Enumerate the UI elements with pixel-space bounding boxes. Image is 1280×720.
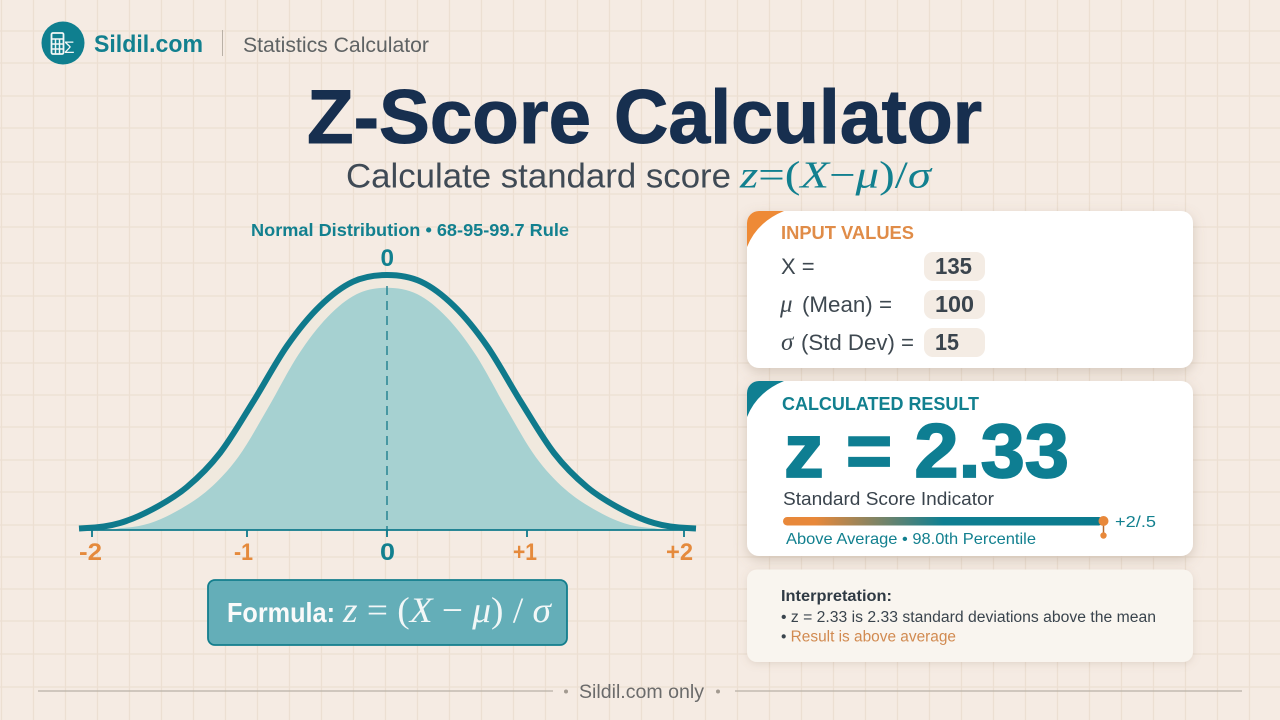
row: standard deviation: (Std Dev) = [801,330,914,355]
subtitle [346,154,933,196]
chart: normal distribution curve [77,220,697,566]
centre dashed line [386,286,388,540]
title [307,75,982,160]
axis [80,530,695,537]
formula box: z = (X − μ) / σ [342,590,552,630]
panel: interpretation: • Result is above average [781,628,956,646]
icon: calculator and sigma logo: Σ [64,38,75,57]
percentile note: Above Average • 98.0th Percentile [786,531,1036,548]
axis labels: +1 [513,539,537,566]
panel: input values [747,211,1193,368]
row: X: 135 [935,253,972,279]
footer: Sildil.com only [579,682,705,703]
bell curve stroke [79,275,696,528]
icon: calculator and sigma logo [42,22,84,64]
row: mean: μ [779,291,793,318]
teal corner accent [747,381,784,417]
heading: CALCULATED RESULT [782,393,980,414]
curve background band [77,275,697,530]
axis labels [79,539,693,566]
chart title: Normal Distribution • 68-95-99.7 Rule [251,220,569,240]
indicator label: Standard Score Indicator [783,488,994,509]
row: mean: (Mean) = [802,292,892,317]
row: standard deviation [781,328,985,357]
panel: calculated result [747,381,1193,556]
score indicator bar [783,514,1156,539]
row: mean [779,290,985,319]
axis labels: -2 [79,539,102,566]
brand name: Sildil.com [94,31,203,58]
subtitle: z=(X−μ)/σ [739,154,933,196]
header: brand and section [42,22,429,64]
title: Z-Score [307,75,591,160]
row: standard deviation: σ [781,329,795,356]
subtitle: Calculate standard score [346,158,731,196]
shaded area under curve [111,288,663,530]
row: standard deviation: 15 [935,329,959,355]
panel: interpretation: Interpretation: [781,588,892,605]
row: mean: 100 [935,291,974,317]
axis labels: 0 [380,539,395,566]
section label: Statistics Calculator [243,34,429,57]
result value: z = 2.33 [784,409,1069,494]
peak label: 0 [380,245,394,272]
orange corner accent [747,211,784,247]
axis labels: -1 [234,539,253,566]
formula box [208,580,567,645]
row: X [781,252,985,281]
formula box: Formula: [227,597,335,628]
panel: interpretation: • z = 2.33 is 2.33 standard deviations above the mean [781,609,1156,626]
footer [38,682,1242,703]
heading: INPUT VALUES [781,222,914,243]
row: X: X = [781,254,815,279]
score indicator bar: +2/.5 [1115,514,1156,531]
panel: interpretation [747,570,1193,662]
axis labels: +2 [666,539,693,566]
title: Calculator [614,75,982,160]
